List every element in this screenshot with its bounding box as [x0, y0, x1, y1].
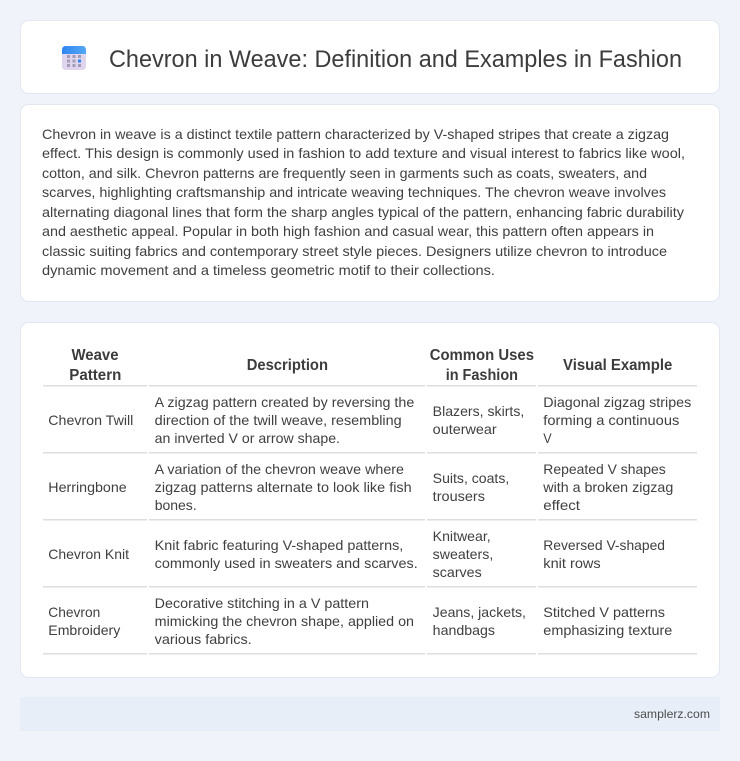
text block: chevron description: effect. This design is commonly used in fashion to add texture and visual interest to fabrics like wool, — [42, 145, 685, 161]
table row: Chevron Embroidery: Embroidery — [48, 622, 120, 638]
table row: Chevron Twill: V — [543, 430, 552, 446]
table row: Chevron Knit: Knitwear, — [433, 528, 491, 544]
panel: header — [20, 20, 720, 94]
footer source text: samplerz.com — [634, 707, 710, 721]
table row: Herringbone — [43, 461, 697, 520]
title: Chevron in Weave: Definition and Examples in Fashion — [109, 46, 682, 73]
table row: Herringbone: with a broken zigzag — [542, 479, 673, 495]
table row: Chevron Embroidery: Stitched V patterns — [543, 604, 665, 620]
table header row: Common Uses — [430, 347, 534, 364]
table row: Chevron Twill: Chevron Twill — [48, 412, 133, 428]
table row: Chevron Twill: A zigzag pattern created by reversing the — [155, 394, 415, 410]
table row: Chevron Twill: Diagonal zigzag stripes — [543, 394, 691, 410]
table row: Herringbone: Suits, coats, — [433, 470, 509, 486]
table row: Chevron Knit: sweaters, — [433, 546, 493, 562]
table row: Chevron Embroidery: Chevron — [48, 604, 100, 620]
panel: weave pattern table — [20, 322, 720, 678]
table row: Chevron Twill — [43, 394, 697, 454]
table header row: Pattern — [69, 367, 121, 384]
table row: Chevron Twill: an inverted V or arrow shape. — [155, 430, 340, 446]
table row: Chevron Embroidery: various fabrics. — [155, 631, 252, 647]
footer bar — [20, 697, 720, 731]
table row: Chevron Embroidery: Decorative stitching in a V pattern — [155, 595, 369, 611]
table row: Herringbone: trousers — [433, 488, 485, 504]
table row: Chevron Knit: commonly used in sweaters and scarves. — [155, 555, 418, 571]
table row: Chevron Embroidery: handbags — [433, 622, 495, 638]
table header row: Weave — [72, 347, 119, 364]
table row: Chevron Embroidery: mimicking the chevron shape, applied on — [155, 613, 414, 629]
text block: chevron description: classic suiting fabrics and contemporary street style pieces. Designers utilize chevron to introduce — [42, 243, 667, 259]
table header row: Visual Example — [563, 357, 673, 374]
table row: Herringbone: bones. — [155, 497, 197, 513]
table row: Herringbone: zigzag patterns alternate to look like fish — [155, 479, 412, 495]
table header row — [43, 347, 697, 386]
table row: Herringbone: A variation of the chevron weave where — [155, 461, 404, 477]
table row: Chevron Knit: Chevron Knit — [48, 546, 129, 562]
table row: Herringbone: Repeated V shapes — [543, 461, 666, 477]
table row: Chevron Knit — [43, 528, 697, 588]
table row: Herringbone: effect — [543, 497, 580, 513]
table row: Chevron Embroidery — [43, 595, 697, 654]
table row: Chevron Knit: knit rows — [543, 555, 601, 571]
text block: chevron description: cotton, and silk. Chevron patterns are frequently seen in garments such as coats, sweaters, and — [42, 165, 647, 181]
table row: Chevron Twill: outerwear — [433, 421, 497, 437]
text block: chevron description: alternating diagonal lines that form the sharp angles typical of the pattern, enhancing fabric durability — [42, 204, 684, 220]
text block: chevron description: Chevron in weave is a distinct textile pattern characterized by V-shaped stripes that create a zigzag — [42, 126, 669, 142]
table row: Herringbone: Herringbone — [48, 479, 127, 495]
table row: Chevron Twill: direction of the twill weave, resembling — [155, 412, 402, 428]
table header row: in Fashion — [446, 367, 518, 384]
text block: chevron description: dynamic movement and a timeless geometric motif to their collections. — [42, 262, 495, 278]
text block: chevron description: scarves, highlighting craftsmanship and intricate weaving techniques. The chevron weave involves — [42, 184, 666, 200]
table row: Chevron Embroidery: Jeans, jackets, — [433, 604, 526, 620]
table row: Chevron Embroidery: emphasizing texture — [543, 622, 673, 638]
table row: Chevron Twill: Blazers, skirts, — [433, 403, 524, 419]
table header row: Description — [247, 357, 328, 374]
panel: introduction — [20, 104, 720, 302]
text block: chevron description: and aesthetic appeal. Popular in both high fashion and casual wear, this pattern often appears in — [42, 223, 654, 239]
table row: Chevron Knit: Reversed V-shaped — [543, 537, 665, 553]
icon: calendar — [62, 46, 86, 70]
table row: Chevron Knit: scarves — [433, 564, 482, 580]
text block: chevron description — [42, 126, 685, 278]
table row: Chevron Twill: forming a continuous — [543, 412, 679, 428]
table row: Chevron Knit: Knit fabric featuring V-shaped patterns, — [155, 537, 403, 553]
